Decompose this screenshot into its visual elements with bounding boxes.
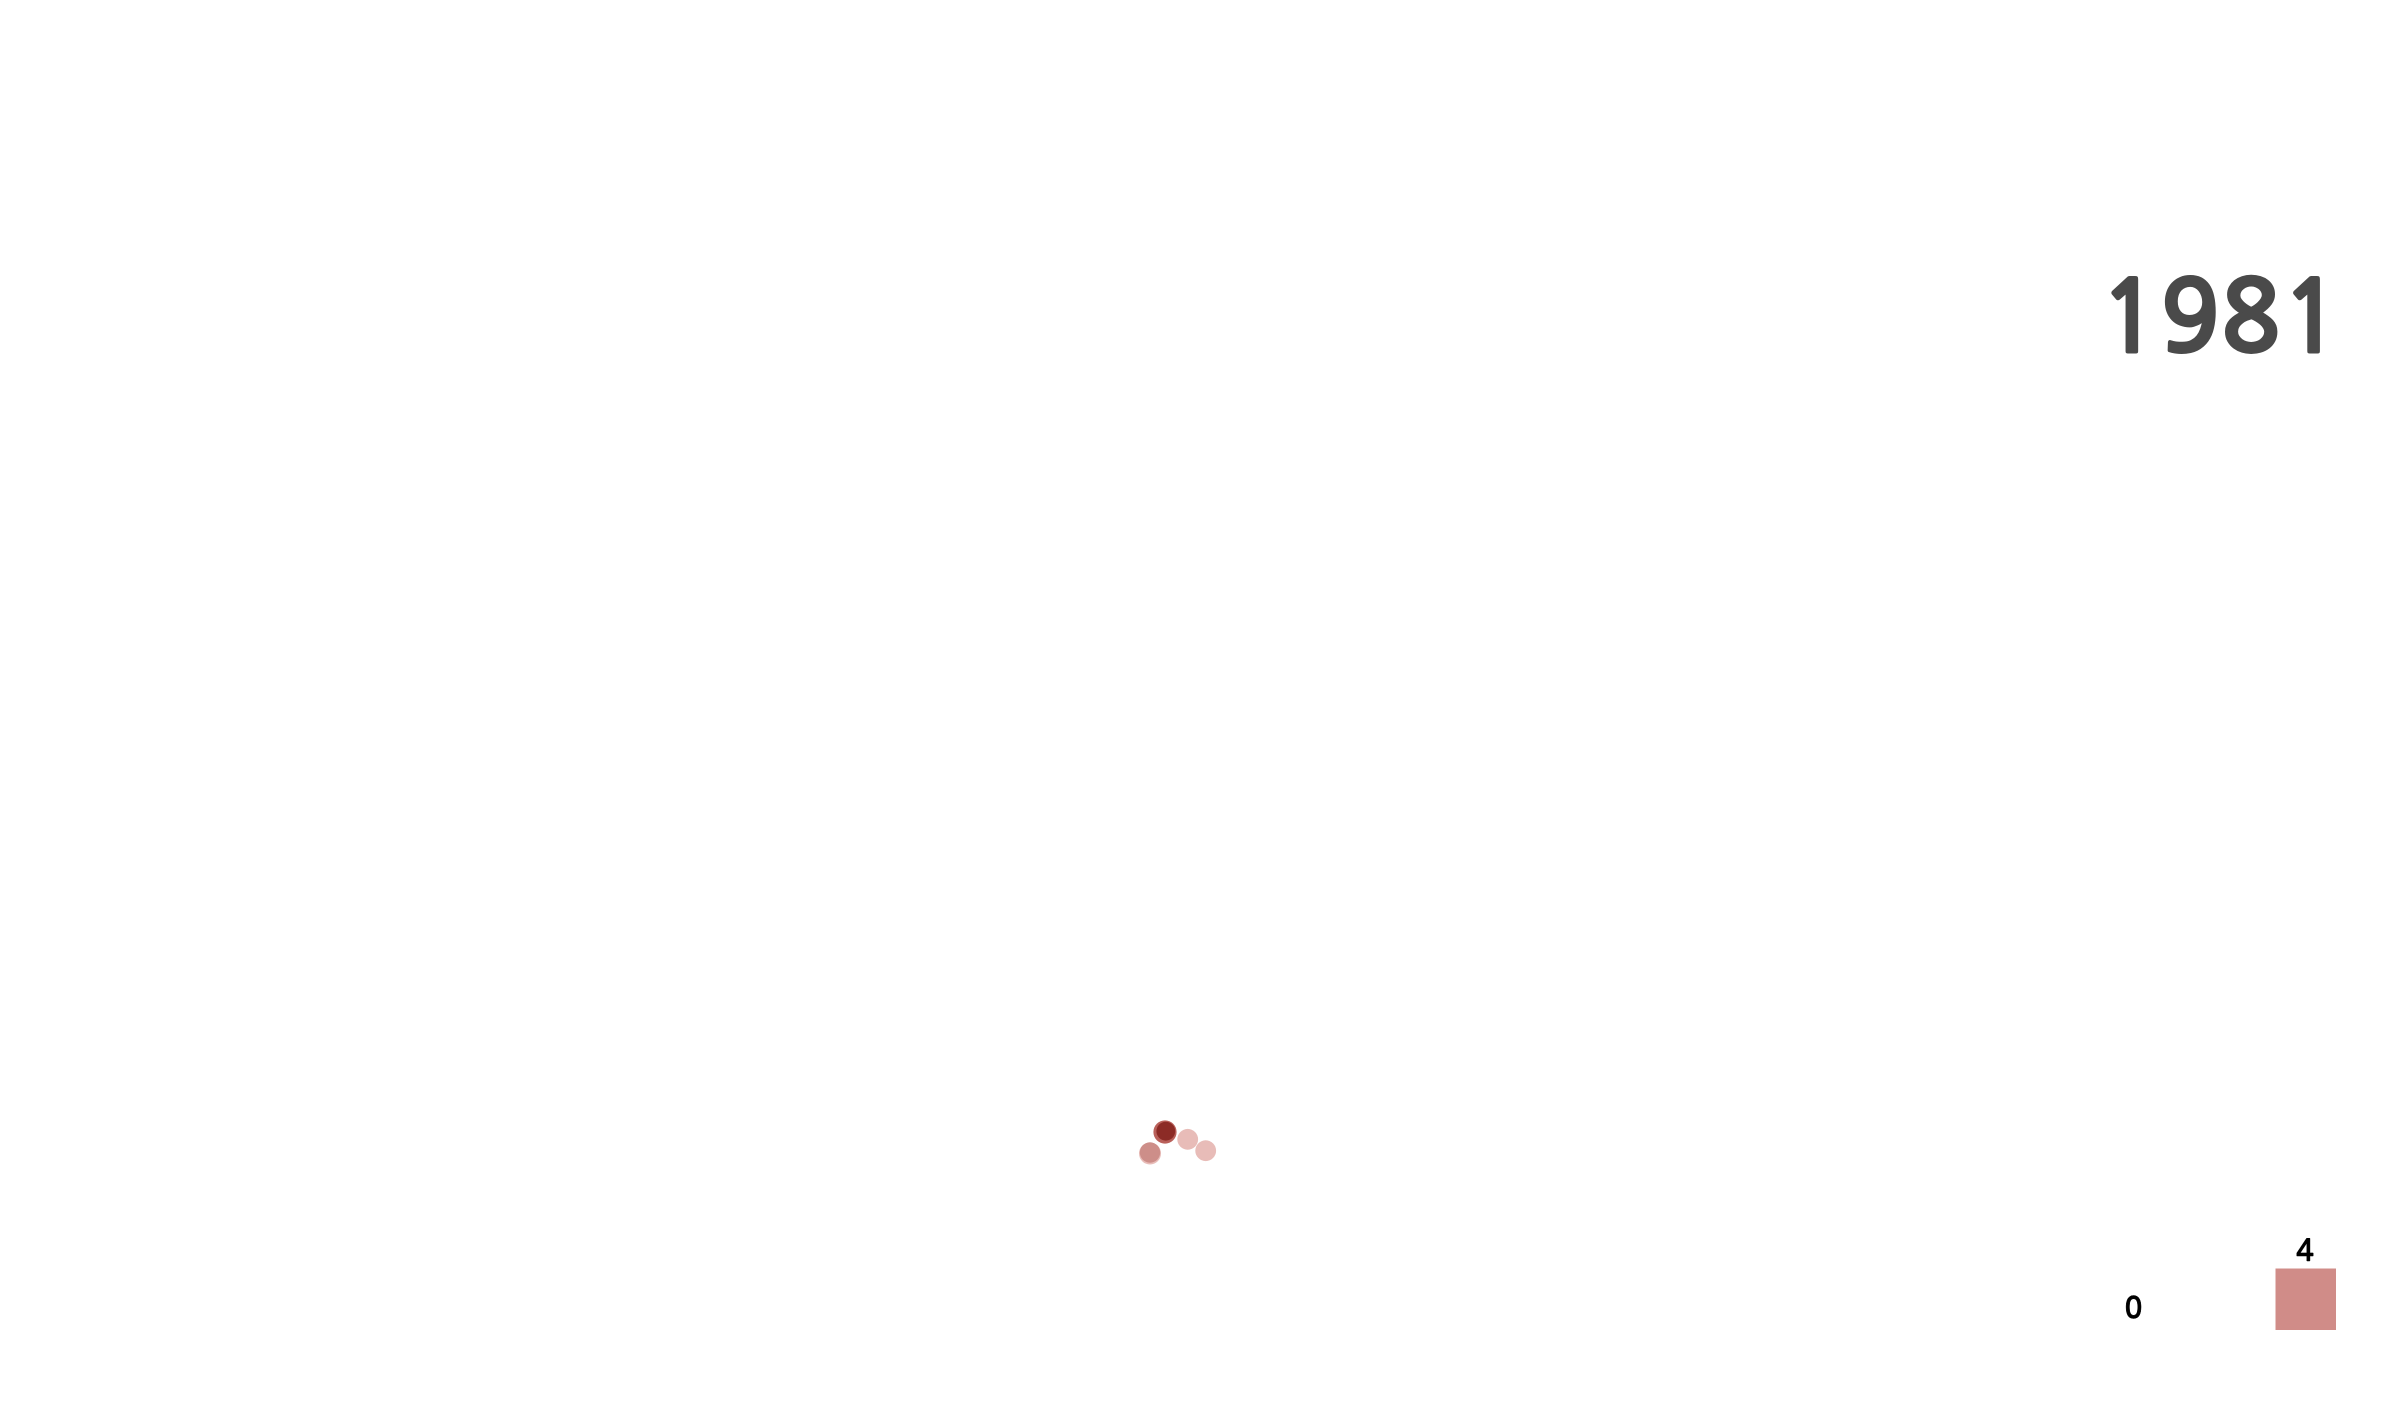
legend bbox=[2124, 1237, 2336, 1330]
legend swatch bbox=[2276, 1268, 2336, 1330]
data point: light dot middle bbox=[1177, 1129, 1198, 1150]
data point: light dot right bbox=[1195, 1140, 1216, 1161]
data point: dark dot bbox=[1153, 1120, 1177, 1144]
legend label: 0: 0 bbox=[2124, 1294, 2143, 1324]
data points cluster bbox=[1139, 1120, 1216, 1164]
legend label: 4: 4 bbox=[2296, 1237, 2314, 1266]
year label: 1981 bbox=[2100, 269, 2342, 367]
data point: medium dot left bbox=[1139, 1142, 1161, 1164]
